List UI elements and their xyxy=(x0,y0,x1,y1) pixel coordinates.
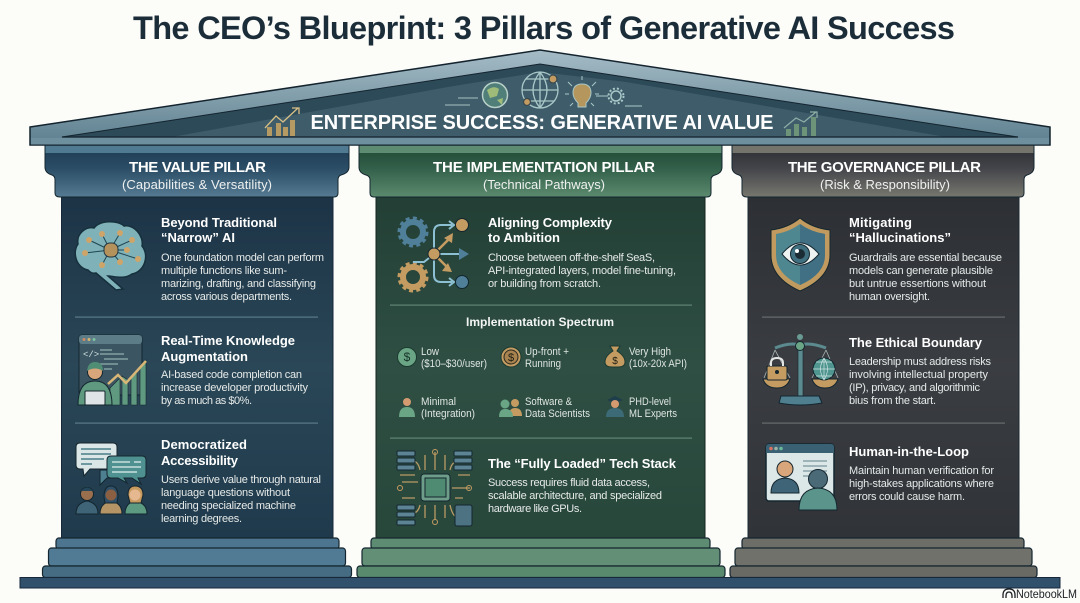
spectrum: minimal team: (Integration) xyxy=(421,408,475,420)
spectrum: up-front cost: $ xyxy=(508,352,514,364)
spectrum: very high cost: $ xyxy=(612,356,618,367)
text: human in the loop: high-stakes applications where xyxy=(849,478,994,490)
value pillar capital: THE VALUE PILLAR xyxy=(129,159,266,176)
text: mitigating hallucinations: but untrue essertions without xyxy=(849,278,986,290)
heading: implementation spectrum: Implementation Spectrum xyxy=(466,315,614,329)
icon: brain network xyxy=(75,222,146,290)
roof icon: gear xyxy=(596,88,642,106)
governance pillar steps xyxy=(730,538,1037,578)
implementation pillar shaft xyxy=(376,195,705,538)
value pillar steps xyxy=(42,538,352,578)
text: ethical boundary xyxy=(849,335,992,407)
text: mitigating hallucinations: models can generate plausible xyxy=(849,265,993,277)
text: beyond narrow AI: “Narrow” AI xyxy=(161,230,235,245)
text: human in the loop: Maintain human verification for xyxy=(849,465,994,477)
governance pillar capital xyxy=(732,145,1034,197)
spectrum: PhD experts xyxy=(606,396,677,420)
text: beyond narrow AI: Beyond Traditional xyxy=(161,215,277,230)
spectrum: very high cost xyxy=(605,346,687,370)
text: fully loaded tech stack: Success requires fluid data access, xyxy=(488,477,650,489)
icon: scales with lock and globe xyxy=(763,334,838,405)
roof icon: right trend chart xyxy=(784,112,817,136)
spectrum: software and data scientists: Data Scientists xyxy=(525,408,590,420)
text: ethical boundary: bius from the start. xyxy=(849,395,936,407)
text: democratized accessibility: language questions without xyxy=(161,487,290,499)
text: beyond narrow AI: across various departments. xyxy=(161,291,292,303)
spectrum: up-front cost: Running xyxy=(525,358,561,370)
text: democratized accessibility: Democratized xyxy=(161,437,247,452)
panel: governance pillar xyxy=(730,145,1037,578)
roof pediment xyxy=(30,50,1050,145)
roof icon: wire globe xyxy=(522,72,558,108)
text: democratized accessibility xyxy=(161,437,321,525)
text: aligning complexity: Choose between off-the-shelf SeaS, xyxy=(488,252,655,264)
text: fully loaded tech stack: The “Fully Loaded” Tech Stack xyxy=(488,456,677,471)
spectrum: software and data scientists xyxy=(499,396,590,420)
value pillar capital xyxy=(45,145,349,197)
governance pillar capital: (Risk & Responsibility) xyxy=(820,177,950,192)
spectrum: low cost xyxy=(398,346,487,370)
text: beyond narrow AI: multiple functions like sum- xyxy=(161,265,287,277)
text: aligning complexity: or building from scratch. xyxy=(488,278,601,290)
spectrum: very high cost: Very High xyxy=(629,346,671,358)
text: mitigating hallucinations: Mitigating xyxy=(849,215,912,230)
spectrum: very high cost: (10x-20x API) xyxy=(629,358,687,370)
text: democratized accessibility: Users derive value through natural xyxy=(161,474,321,486)
text: ethical boundary: The Ethical Boundary xyxy=(849,335,983,350)
text: human in the loop: errors could cause harm. xyxy=(849,491,965,503)
text: real-time knowledge: AI-based code completion can xyxy=(161,369,302,381)
text: real-time knowledge: by as much as $0%. xyxy=(161,395,252,407)
implementation pillar capital: THE IMPLEMENTATION PILLAR xyxy=(433,159,655,176)
panel: implementation pillar xyxy=(357,145,725,578)
value pillar shaft xyxy=(62,195,333,538)
spectrum: minimal team: Minimal xyxy=(421,396,456,408)
implementation pillar steps xyxy=(357,538,725,578)
spectrum: software and data scientists: Software & xyxy=(525,396,573,408)
icon: human in the loop window xyxy=(766,444,837,510)
spectrum: PhD experts: PHD-level xyxy=(629,396,671,408)
spectrum: up-front cost: Up-front + xyxy=(525,346,569,358)
base platform xyxy=(20,578,1060,588)
text: ethical boundary: (IP), privacy, and algorithmic xyxy=(849,382,980,394)
spectrum: minimal team xyxy=(399,396,475,420)
spectrum: low cost: $ xyxy=(404,350,411,364)
implementation pillar capital: (Technical Pathways) xyxy=(483,177,605,192)
text: mitigating hallucinations: “Hallucinations” xyxy=(849,230,951,245)
text: beyond narrow AI xyxy=(161,215,324,303)
text: fully loaded tech stack: hardware like GPUs. xyxy=(488,503,582,515)
spectrum: low cost: Low xyxy=(421,346,439,358)
text: beyond narrow AI: marizing, drafting, and classifying xyxy=(161,278,316,290)
text: democratized accessibility: needing specialized machine xyxy=(161,500,296,512)
icon: shield with eye xyxy=(771,218,830,291)
text: mitigating hallucinations: human oversight. xyxy=(849,291,930,303)
text: democratized accessibility: learning degrees. xyxy=(161,513,242,525)
text: real-time knowledge xyxy=(161,333,308,407)
text: aligning complexity: Aligning Complexity xyxy=(488,215,613,230)
spectrum: up-front cost xyxy=(501,346,569,370)
text: real-time knowledge: Augmentation xyxy=(161,349,248,364)
icon: gears and routing arrows xyxy=(399,218,469,291)
value pillar capital: (Capabilities & Versatility) xyxy=(122,177,272,192)
text: beyond narrow AI: One foundation model can perform xyxy=(161,252,324,264)
title: The CEO’s Blueprint: 3 Pillars of Generative AI Success xyxy=(133,10,955,46)
text: fully loaded tech stack: scalable architecture, and specialized xyxy=(488,490,662,502)
roof icon: earth globe xyxy=(445,82,508,108)
implementation pillar capital xyxy=(359,145,722,197)
text: human in the loop xyxy=(849,444,994,503)
roof heading: ENTERPRISE SUCCESS: GENERATIVE AI VALUE xyxy=(310,112,774,134)
text: mitigating hallucinations xyxy=(849,215,1002,303)
text: mitigating hallucinations: Guardrails are essential because xyxy=(849,252,1002,264)
spectrum: low cost: ($10–$30/user) xyxy=(421,358,487,370)
text: aligning complexity xyxy=(488,215,676,290)
icon: developer with growth chart xyxy=(78,335,146,405)
text: ethical boundary: Leadership must address risks xyxy=(849,356,992,368)
icon: developer with growth chart: </> xyxy=(83,350,99,360)
text: aligning complexity: to Ambition xyxy=(488,230,560,245)
spectrum: PhD experts: ML Experts xyxy=(629,408,677,420)
text: aligning complexity: API-integrated layers, model fine-tuning, xyxy=(488,265,676,277)
icon: chip with servers xyxy=(397,450,472,526)
text: ethical boundary: involving intellectual property xyxy=(849,369,988,381)
panel: value pillar xyxy=(42,145,352,578)
text: real-time knowledge: Real-Time Knowledge xyxy=(161,333,295,348)
text: real-time knowledge: increase developer productivity xyxy=(161,382,308,394)
roof icon: light bulb xyxy=(565,76,599,107)
roof icon: left trend chart xyxy=(265,108,299,136)
governance pillar shaft xyxy=(748,195,1019,538)
text: human in the loop: Human-in-the-Loop xyxy=(849,444,969,459)
text: fully loaded tech stack xyxy=(488,456,677,515)
governance pillar capital: THE GOVERNANCE PILLAR xyxy=(788,159,981,176)
icon: chat bubbles and people xyxy=(76,443,147,514)
text: democratized accessibility: Accessibility xyxy=(161,453,239,468)
